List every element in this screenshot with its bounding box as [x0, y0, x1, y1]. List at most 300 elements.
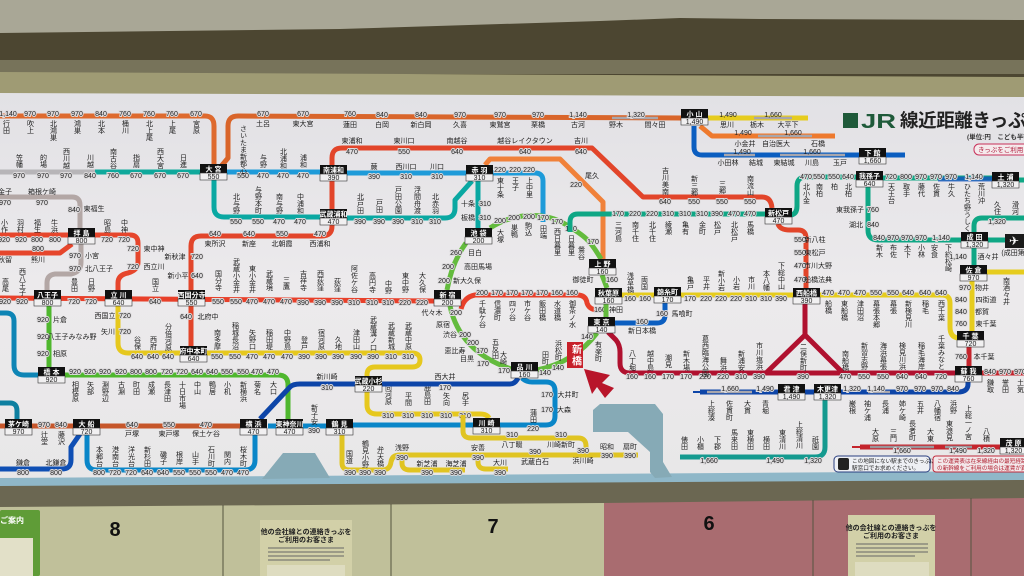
route: Musashino line: 550 [398, 149, 410, 156]
route: Negishi line: 本郷台 [96, 445, 103, 468]
route: Chuo line west: 吉祥寺 [300, 270, 307, 291]
legend: ticket note: この地図にない駅までのきっぷは [852, 457, 936, 465]
route: Chuo-Sobu local line: 四ツ谷 [508, 300, 516, 322]
route: Tokaido line: 辻堂 [40, 430, 48, 445]
route: Yokohama line: 920 [37, 351, 49, 358]
route: Keihin-Tohoku line north: 220 [509, 167, 521, 174]
route: Sobu local line yellow: 470 [838, 290, 850, 297]
route: Chuo line west: 720 [68, 299, 80, 306]
route: Yamanote line: 260 [450, 250, 462, 257]
route: Yamanote line: 200 [523, 214, 535, 221]
notice pill [974, 144, 1024, 155]
route: Musashino line: 新座 [242, 239, 256, 248]
station: Akabane [466, 165, 493, 182]
route: Nambu line: 550 [229, 354, 241, 361]
route: Yokohama line: 640 [206, 369, 218, 376]
station: Tsurumi: 鶴 見 [332, 420, 347, 428]
route: Tsurumi line: 弁天橋 [376, 445, 384, 468]
route: Ome and Itsukaichi lines: 小作 [0, 218, 8, 234]
route: Uchibo line: 840 [947, 386, 959, 393]
route: Joban line: 天王台 [888, 183, 895, 205]
route: Mito line: 1,490 [733, 149, 751, 156]
notice poster right: ご利用のお客さま [863, 531, 919, 540]
route: Saikyo line: 390 [373, 219, 385, 226]
route: Keiyo line and Musashino fork: 160 [644, 374, 656, 381]
route: Chuo-Sobu local line: 信濃町 [494, 299, 501, 321]
route: Utsunomiya line: 670 [297, 111, 309, 118]
route: Yokohama line: 矢部 [86, 380, 94, 396]
route: Musashino line: 新三郷 [690, 174, 698, 197]
route: Nambu line: 390 [367, 354, 379, 361]
route: Narita line: 下総松崎 [944, 244, 952, 272]
route: Negishi line: 山手 [192, 451, 199, 466]
route: Sobu local line yellow: 550 [870, 290, 882, 297]
route: Keiyo line and Musashino fork: 市川塩浜 [756, 341, 763, 371]
blue strip under the map [0, 471, 1024, 486]
route: Uchibo line: 970 [931, 386, 943, 393]
route: Negishi line: 石川町 [208, 446, 215, 467]
route: Sotobo line south: 三門 [890, 428, 897, 443]
route: Saikyo line: 中浦和 [296, 192, 304, 215]
route: Joban line: 馬橋 [746, 221, 754, 236]
route: Saikyo line: 北与野 [232, 193, 240, 214]
route: Negishi line [87, 434, 255, 477]
route: Yokosuka line south [0, 434, 80, 477]
route: Yamanote line: 170 [565, 226, 577, 233]
route: Yamanote line: 200 [494, 218, 506, 225]
route: Tsurumi line: 390 [374, 470, 386, 477]
wall panel seams [223, 498, 971, 576]
route: Joban line: 390 [711, 211, 723, 218]
route: Ome and Itsukaichi lines: 福生 [34, 218, 41, 233]
route: Sobu local line yellow: 本八幡 [762, 269, 770, 292]
route: Uchibo line [693, 381, 968, 422]
route: Utsunomiya line north of Oyama: 1,660 [784, 130, 802, 137]
route: Sotobo and Chiba connecting line: 970 [999, 369, 1011, 376]
route: Utsunomiya line: 970 [454, 112, 466, 119]
route: Kururi line: 俵田 [680, 435, 688, 451]
route: Yokosuka line via Musashi-Kosugi: 310 [321, 385, 333, 392]
route: Yamanote line: 大崎 [500, 350, 507, 365]
route: Sobu local line yellow: 310 [745, 296, 757, 303]
route: Utsunomiya line north of Oyama: 小金井 [734, 139, 756, 148]
route: Chuo line west: 武蔵小金井 [232, 257, 240, 294]
route: Musashino line: 西浦和 [310, 239, 330, 248]
route: Narita line: 南酒々井 [1002, 276, 1010, 306]
route: Keihin-Tohoku line north: 220 [523, 167, 535, 174]
route: Nambu line: 向河原 [384, 383, 392, 405]
station: Akihabara [595, 288, 622, 305]
route: Kururi line: 下郡 [714, 436, 721, 451]
route: Keiyo line and Musashino fork: 170 [680, 374, 692, 381]
route: Nambu line: 310 [421, 413, 433, 420]
route: Saikyo line: 戸田公園 [394, 186, 402, 215]
route: Nambu line: 550 [211, 354, 223, 361]
station: Tachikawa: 立 川 [111, 290, 126, 300]
station: Omiya: 大 宮 [206, 164, 221, 174]
route: Narita line: 970 [901, 235, 913, 242]
station: Omiya [200, 164, 227, 181]
route: Narita line [836, 187, 1024, 306]
station: Hachioji: 800 [42, 300, 53, 307]
route: Tsurumi line: 390 [529, 449, 541, 456]
route: Yamanote line: 日暮里 [568, 235, 575, 256]
route: Utsunomiya line north of Oyama: 石橋 [811, 139, 825, 148]
route: Narita line: 970 [887, 235, 899, 242]
route: Chuo line west: 東小金井 [248, 264, 256, 294]
green information sign: ご案内 [0, 515, 24, 525]
route: Sobu local line yellow: 都賀 [975, 307, 989, 316]
route: Tsurumi line: 安善 [471, 443, 485, 452]
lighter olive strip [0, 60, 1024, 74]
route: Sotobo line south: 大東 [926, 427, 934, 443]
route: Ome and Itsukaichi lines: 920 [15, 237, 27, 244]
route: Saikyo line: 550 [230, 219, 242, 226]
route: Kawagoe line: 670 [130, 173, 142, 180]
route: Narita line: 布佐 [890, 243, 897, 259]
route: Sobu local line yellow: 稲毛 [922, 299, 929, 314]
route: Yokohama line: 鴨居 [208, 380, 216, 396]
route: Chuo-Sobu local line: 神田 [609, 305, 623, 314]
route: Nambu line: 南多摩 [214, 328, 221, 351]
route: Kururi line [680, 400, 825, 465]
route: Sobu local line yellow: 両国 [640, 276, 648, 291]
route: Ome and Itsukaichi lines: 720 [118, 237, 130, 244]
route: Hachiko line: 970 [69, 253, 81, 260]
station: Musashi-Urawa: 470 [328, 219, 339, 226]
route: Saikyo line: 390 [354, 219, 366, 226]
route: Narita line: 久住 [994, 200, 1001, 215]
route: Tsurumi line: 海芝浦 [446, 459, 466, 468]
route: Ryomo line: 大平下 [778, 120, 798, 129]
route: Sotobo and Chiba connecting line: 誉田 [1002, 378, 1009, 394]
notice poster left: ご利用のお客さま [278, 535, 334, 544]
route: Keihin-Tohoku line north: 220 [494, 167, 506, 174]
route: Sobu local line yellow: 640 [902, 290, 914, 297]
route: Mito line: 小田林 [718, 158, 738, 167]
route: Utsunomiya line: 970 [532, 112, 544, 119]
route: Nambu line: 矢野口 [248, 328, 256, 350]
route: Tsurumi line: 390 [624, 453, 636, 460]
route: Saikyo line: 戸田 [376, 199, 383, 214]
route: Takasaki line: 桶川 [122, 119, 129, 134]
route: Joban line: 綾瀬 [664, 220, 672, 236]
station: Chigasaki [5, 419, 32, 436]
route: Chuo line west: 中野 [384, 279, 392, 294]
station: Higashi-Kanagawa: 東神奈川 [276, 420, 304, 428]
route: Musashino line: 吉川 [574, 137, 588, 145]
route: Nambu line: 640 [131, 354, 143, 361]
JR logo: JR [861, 111, 897, 133]
route: Hachiko line: 970 [36, 200, 48, 207]
route: Negishi line: 640 [157, 470, 169, 477]
route: Chuo line west: 西八王子 [18, 268, 26, 297]
station: Shin-Matsudo: 新松戸 [768, 208, 789, 218]
route: Kururi line: 1,660 [700, 458, 718, 465]
route: Takasaki line: 840 [95, 111, 107, 118]
station: Tsurumi [326, 419, 353, 436]
route: Chuo-Sobu local line: 飯田橋 [538, 300, 546, 322]
station: Nishi-Funabashi: 西船橋 [796, 288, 817, 298]
route: Musashino line: 東松戸 [804, 248, 826, 257]
route: Yokosuka line via Musashi-Kosugi: 170 [439, 385, 451, 392]
route: Sobu local line yellow: 470 [822, 290, 834, 297]
route: Chuo-Sobu local line: 千駄ケ谷 [478, 299, 486, 329]
route: Keihin-Tohoku line north: 310 [400, 174, 412, 181]
route: Kururi line: 東清川 [778, 428, 786, 450]
route: Yokohama line: 470 [251, 369, 263, 376]
route: Kawagoe line: 970 [37, 173, 49, 180]
route: Musashino line: 新八柱 [804, 235, 826, 244]
route: Takasaki line: 宮原 [192, 119, 200, 134]
route: Keihin-Tohoku line north: 浦和 [300, 153, 307, 169]
legend: ticket note: 駅窓口でお求めください。 [852, 464, 919, 472]
route: Nambu line: 390 [315, 354, 327, 361]
route: Kawagoe line: 南古谷 [110, 147, 117, 170]
route: Narita line: 1,320 [988, 219, 1006, 226]
route: Sotobo and Chiba connecting line: 土気 [1016, 378, 1024, 394]
station: Ikebukuro [465, 228, 492, 245]
station: Akihabara: 秋葉原 [598, 288, 619, 298]
route: Narita line: 1,140 [949, 254, 967, 261]
route: Musashino line: 南流山 [746, 174, 754, 197]
route: Yamanote line: 浜松町 [554, 339, 562, 361]
route: Yokohama line: 550 [237, 369, 249, 376]
station: Ueno: 160 [597, 269, 608, 276]
route: Yokosuka line south: 800 [17, 470, 29, 477]
route: Keiyo line and Musashino fork: 640 [896, 374, 908, 381]
route: Sobu rapid line: 馬喰町 [672, 309, 692, 318]
green information sign [0, 510, 40, 576]
water: Tokyo bay [593, 404, 672, 478]
route: Joban line: 三河島 [614, 221, 622, 243]
route: Kururi line: 上総清川 [796, 420, 803, 449]
route: Nambu line: 宿河原 [318, 328, 325, 350]
route: Ome and Itsukaichi lines: 牛浜 [50, 218, 58, 234]
route: Musashino line: 470 [794, 277, 806, 284]
route: Kawagoe line: 西川越 [62, 148, 70, 170]
route: Nambu line: 310 [385, 354, 397, 361]
route: Chuo line west: 470 [280, 299, 292, 306]
route: Narita line: 840 [867, 222, 879, 229]
route: Sobu local line yellow: 新小岩 [718, 269, 725, 292]
route: Keihin-Tohoku line north: 蕨 [370, 162, 378, 171]
route: Saikyo line: 390 [392, 219, 404, 226]
station: Kisarazu: 1,320 [819, 394, 836, 401]
route: Narita line: 東我孫子 [836, 205, 864, 214]
route: Narita line: 小林 [918, 243, 925, 259]
route: Chuo line west: 470 [246, 299, 258, 306]
route: Tsurumi line: 昭和 [600, 442, 614, 451]
route: Keihin-Tohoku line south: 170 [541, 392, 553, 399]
route: Yamanote line: 170 [498, 368, 510, 375]
station: Mobara [1000, 438, 1024, 455]
route: Sobu local line yellow: 760 [955, 321, 967, 328]
route: Chuo line west: 国分寺 [214, 270, 222, 291]
route: Tsurumi line: 浜川崎 [572, 456, 594, 465]
route: Musashino line: 550 [276, 231, 288, 238]
station: Hachioji: 八王子 [37, 292, 58, 300]
station: Fuchu-Hommachi: 640 [188, 356, 199, 363]
route: Sobu local line yellow: 160 [639, 296, 651, 303]
title text: 線近距離きっぷ [900, 110, 1024, 131]
route: Nambu line: 武蔵新城 [388, 321, 395, 351]
route: Saikyo line: 470 [294, 219, 306, 226]
route: Musashino line: 640 [191, 273, 203, 280]
route: Musashino line: 720 [191, 254, 203, 261]
route: Nambu line: 西府 [150, 336, 157, 351]
route: Yamanote line: 目黒 [460, 355, 474, 363]
route: Chuo line west: 阿佐ケ谷 [350, 264, 358, 294]
station: Musashi-Urawa [320, 209, 348, 226]
route: Uchibo line: 1,320 [843, 386, 861, 393]
route: Utsunomiya line: 1,140 [569, 112, 587, 119]
route: Keihin-Tohoku line north: さいたま新都心 [240, 125, 247, 174]
route: Tsurumi line: 武蔵白石 [521, 457, 549, 466]
route: Utsunomiya line: 970 [494, 112, 506, 119]
route: Chuo-Sobu local line: 170 [491, 290, 503, 297]
route: Kawagoe line: 670 [154, 173, 166, 180]
route: Sotobo and Chiba connecting line: 840 [984, 369, 996, 376]
route: Yamanote line: 田町 [542, 351, 549, 365]
route: Yokohama line: 新横浜 [240, 380, 247, 403]
station: Nishi-Funabashi: 390 [801, 298, 812, 305]
route: Takasaki line: 行田 [2, 119, 10, 135]
route: Chuo line west: 大久保 [418, 271, 426, 294]
route: Uchibo line: 五井 [916, 400, 924, 415]
route: Chuo line west: 390 [314, 300, 326, 307]
route: Kawagoe line: 670 [177, 173, 189, 180]
route: Joban line: 550 [828, 174, 840, 181]
route: Keihin-Tohoku line south: 170 [541, 407, 553, 414]
route: Tsurumi line: 390 [472, 455, 484, 462]
route: Sobu local line yellow: 幕張 [890, 299, 897, 315]
station: Narita: 成 田 [967, 232, 982, 242]
route: Keihin-Tohoku line south [268, 378, 578, 435]
route: Yamanote line: 200 [508, 215, 520, 222]
route: Uchibo line: 姉ケ崎 [898, 399, 906, 421]
route: Chuo-Sobu local line [461, 290, 623, 329]
route: Utsunomiya line: 栗橋 [531, 120, 545, 129]
water: left bay [262, 453, 330, 479]
route: Joban line: 310 [679, 211, 691, 218]
station: Kawasaki: 310 [481, 428, 492, 435]
route: Chuo line west: 220 [399, 300, 411, 307]
route: Nambu line: 武蔵溝ノ口 [370, 315, 377, 351]
route: Musashino line: 越谷レイクタウン [497, 136, 553, 145]
route: Sobu local line yellow: 220 [730, 296, 742, 303]
route: Yokohama line: 640 [191, 369, 203, 376]
route: Nambu line: 390 [332, 354, 344, 361]
route: Tokaido line [0, 422, 240, 446]
route: Kawagoe line: 760 [107, 173, 119, 180]
frame rail above the map [0, 72, 1024, 98]
route: Mito line [694, 126, 905, 167]
station: Shinagawa: 品 川 [517, 364, 532, 372]
station: Akabane: 赤 羽 [472, 166, 487, 174]
route: Utsunomiya line: 蓮田 [343, 120, 357, 129]
route: Sotobo line south: 1,660 [893, 448, 911, 455]
route: Ryomo line: 思川 [720, 121, 734, 129]
station: Kimitsu [778, 384, 805, 401]
route: Musashino line: 550 [716, 199, 728, 206]
route: Utsunomiya line: 間々田 [644, 121, 666, 129]
route: Uchibo line: 上総湊 [708, 399, 715, 422]
route: Ome and Itsukaichi lines: 800 [32, 246, 44, 253]
station: Hachioji [34, 290, 61, 307]
route: Uchibo line: 八幡宿 [934, 400, 941, 422]
route: Chuo line west: 220 [416, 300, 428, 307]
station: Yokohama [240, 419, 267, 436]
route: Sotobo line south: 東浪見 [946, 419, 953, 442]
route: Sobu rapid line: 新日本橋 [628, 326, 656, 335]
route: Sagami and left-edge lines [0, 313, 38, 419]
route: Chuo line west: 640 [149, 299, 161, 306]
route: Saikyo line: 浮間舟渡 [414, 185, 421, 215]
route: Sotobo line south [852, 404, 1000, 455]
route: Joban line: 1,140 [965, 174, 983, 181]
route: Ome and Itsukaichi lines: 720 [127, 246, 139, 253]
route: Chuo line west: 470 [263, 299, 275, 306]
wall panels: pink [604, 498, 1024, 576]
route: Yamanote line: 代々木 [422, 308, 442, 317]
route: Saikyo line: 北戸田 [356, 193, 364, 215]
route: Musashino line [164, 136, 832, 346]
route: Utsunomiya line north of Oyama [700, 126, 835, 148]
route: Saikyo line: 南与野 [276, 192, 283, 214]
route: Sobu local line yellow: 160 [624, 296, 636, 303]
route: Sobu local line yellow: 幕張本郷 [872, 299, 880, 329]
route: Nambu line: 稲城長沼 [232, 321, 239, 351]
route: Sotobo and Chiba connecting line [955, 347, 1024, 394]
route: Yokohama line: 920 [37, 317, 49, 324]
route: Yamanote line: 駒込 [524, 221, 532, 237]
route: Keiyo line and Musashino fork [608, 303, 958, 381]
route: Tsurumi line: 浅野 [395, 443, 409, 452]
station: Kawasaki [473, 418, 500, 435]
route: Uchibo line: 970 [914, 386, 926, 393]
route: Negishi line: 470 [221, 470, 233, 477]
route: Negishi line: 根岸 [176, 450, 183, 466]
route: Sobu local line yellow: 津田沼 [856, 300, 864, 322]
route: Musashino line: 船橋法典 [804, 275, 832, 284]
panel number 6: 6 [703, 513, 715, 535]
route: Sobu local line yellow: 小岩 [732, 275, 740, 291]
route: Yokohama line: 720 [161, 369, 173, 376]
station: Chiba [957, 331, 984, 348]
route: Chuo-Sobu local line: 200 [476, 290, 488, 297]
route: Yokosuka line via Musashi-Kosugi [260, 372, 518, 419]
route: Sobu local line yellow: 市川 [748, 275, 755, 290]
route: Yamanote line: 200 [467, 340, 479, 347]
route: Yokohama line: 成瀬 [148, 380, 155, 396]
route: Yamanote line: 170 [476, 348, 488, 355]
station: Sakura [960, 265, 987, 282]
route: Ome and Itsukaichi lines: 羽村 [16, 219, 24, 233]
route: Utsunomiya line: 東鷲宮 [490, 120, 510, 129]
route: Yamanote line: 170 [477, 361, 489, 368]
route: Yamanote line: 恵比寿 [444, 346, 466, 355]
route: Tokaido line: 藤沢 [58, 430, 65, 446]
route: Mito line: 川島 [805, 158, 819, 167]
route: Keihin-Tohoku line north: 310 [431, 174, 443, 181]
route: Utsunomiya line: 土呂 [256, 119, 270, 128]
route: Negishi line: 港南台 [112, 445, 119, 468]
route: Yokohama line: 中山 [194, 380, 201, 396]
station: Kinshicho: 170 [662, 297, 673, 304]
station: Ofuna: 大 船 [79, 420, 94, 428]
route: Keihin-Tohoku line north: 川口 [430, 163, 444, 171]
